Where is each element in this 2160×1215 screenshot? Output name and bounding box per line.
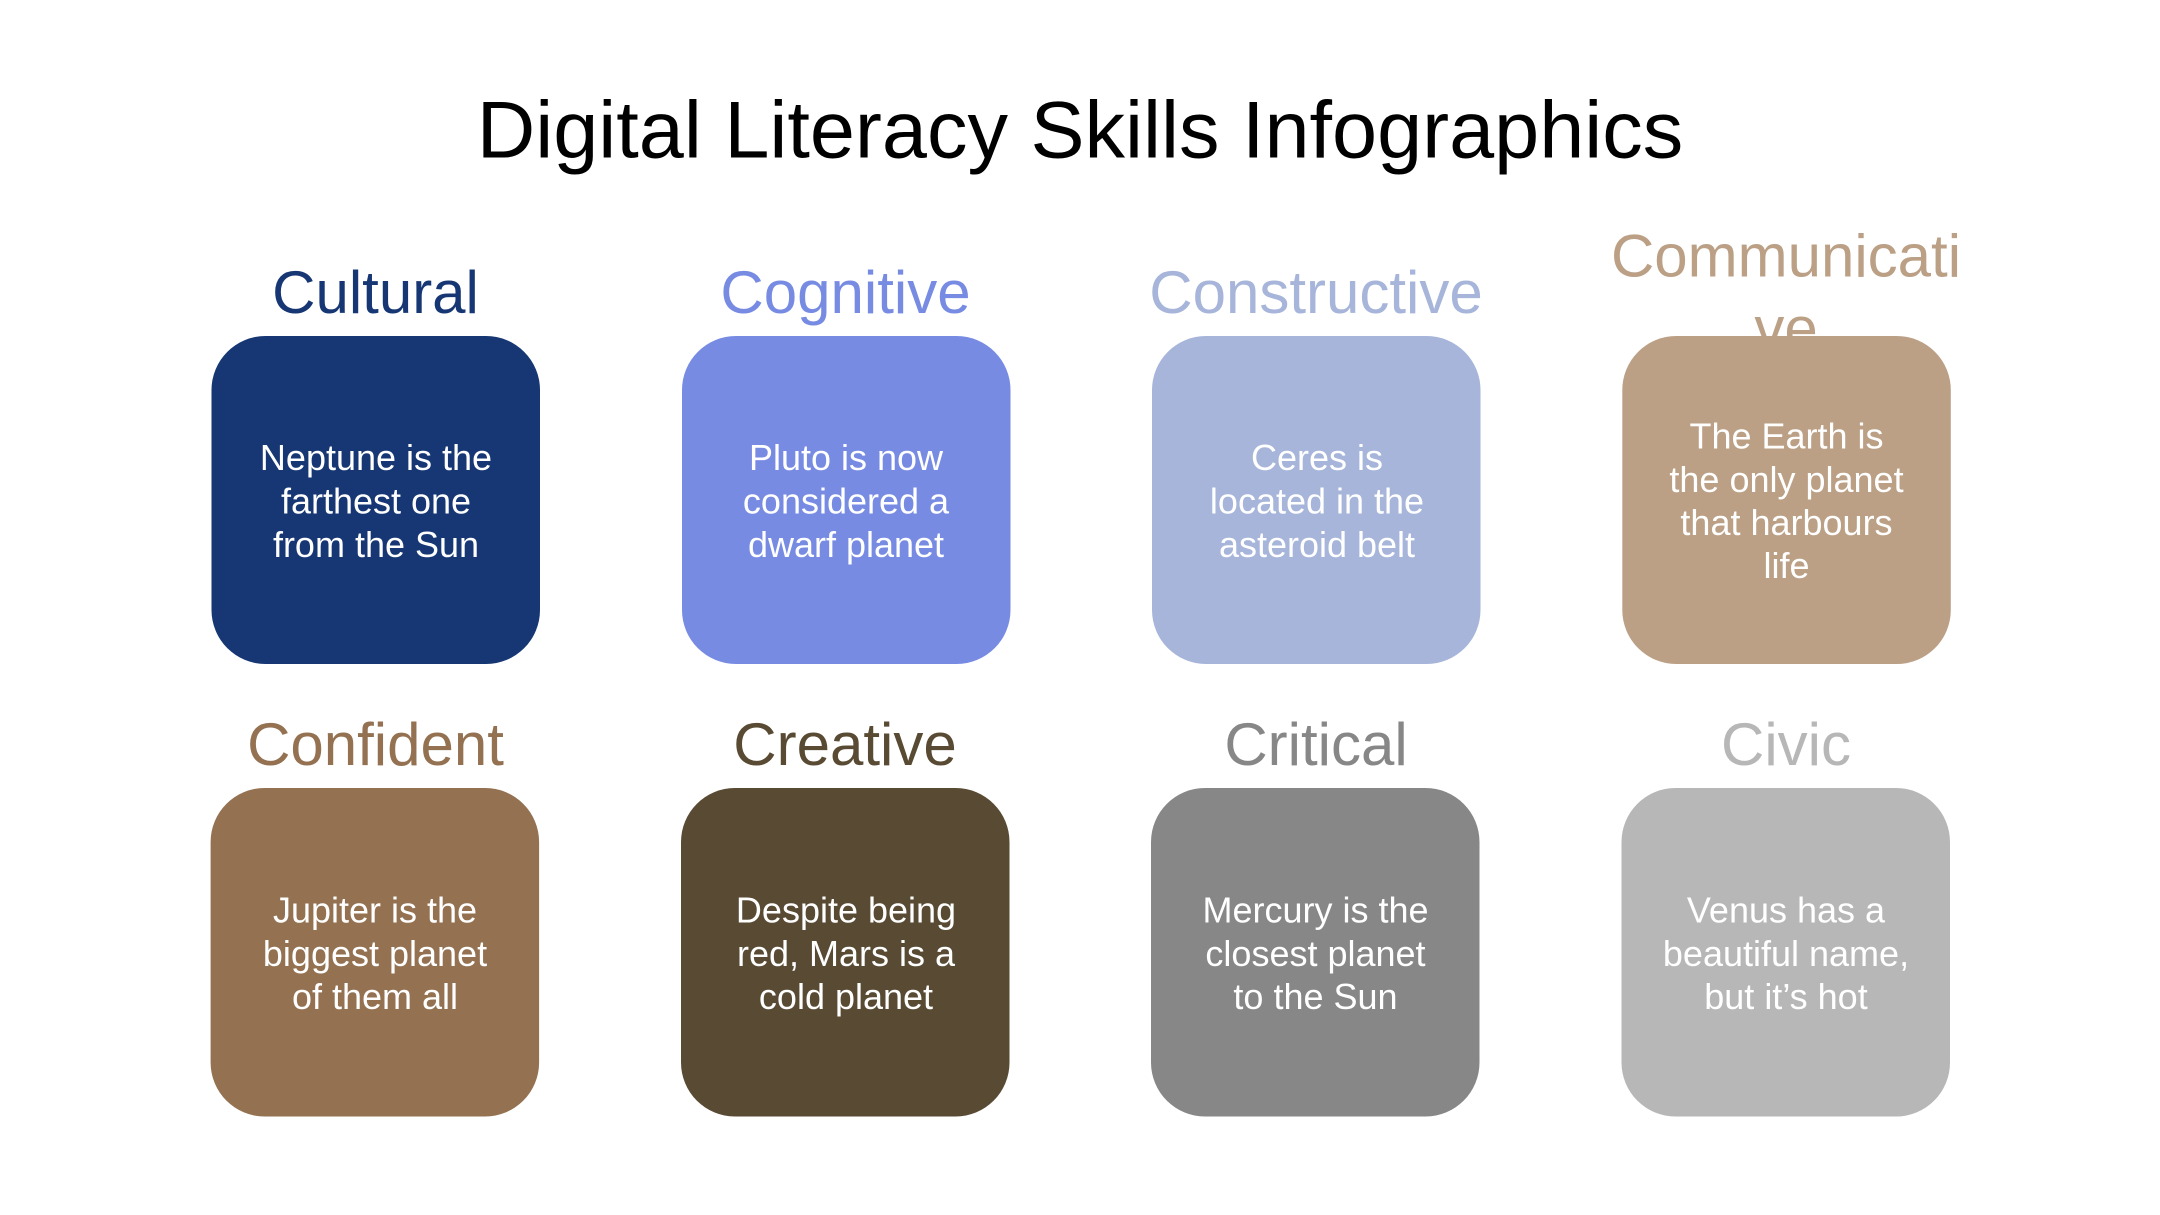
text: Civic description: beautiful name, xyxy=(1663,933,1909,974)
text: Cultural description: from the Sun xyxy=(273,524,479,565)
heading: Constructive: Constructive xyxy=(1149,259,1483,326)
heading: Communicative, wrapped behind the card: Communicati xyxy=(1611,222,1961,290)
text: Creative description: Despite being xyxy=(736,890,956,930)
panel: Confident xyxy=(211,711,539,1116)
heading: Critical: Critical xyxy=(1224,711,1408,778)
panel: Cognitive xyxy=(682,259,1010,664)
card: Cognitive xyxy=(682,336,1010,664)
text: Cultural description: farthest one xyxy=(281,480,471,522)
heading: Confident: Confident xyxy=(247,711,504,778)
title: Digital Literacy Skills Infographics xyxy=(477,86,1683,176)
text: Communicative description: life xyxy=(1763,545,1810,586)
text: Confident description: of them all xyxy=(292,976,458,1017)
panel: Constructive xyxy=(1149,259,1483,664)
heading: Cognitive: Cognitive xyxy=(720,259,971,326)
text: Communicative description: the only planet xyxy=(1669,459,1904,500)
heading: Creative: Creative xyxy=(733,711,957,778)
panel: Communicative xyxy=(1611,222,1961,664)
text: Critical description: to the Sun xyxy=(1233,976,1398,1017)
text: Critical description: closest planet xyxy=(1205,933,1426,974)
text: Creative description: cold planet xyxy=(759,976,933,1017)
text: Constructive description: asteroid belt xyxy=(1219,524,1415,565)
heading: Communicative, wrapped behind the card: ve xyxy=(1754,295,1818,362)
text: Cultural description: Neptune is the xyxy=(260,437,492,478)
panel: Civic xyxy=(1622,711,1950,1116)
text: Civic description: Venus has a xyxy=(1687,890,1886,930)
text: Civic description: but it’s hot xyxy=(1704,976,1868,1017)
card: Communicative xyxy=(1622,336,1951,664)
heading: Cultural: Cultural xyxy=(272,259,479,326)
text: Critical description: Mercury is the xyxy=(1202,890,1429,930)
card: Critical xyxy=(1151,788,1480,1116)
text: Confident description: Jupiter is the xyxy=(273,890,477,930)
text: Communicative description: that harbours xyxy=(1680,502,1893,543)
text: Cognitive description: Pluto is now xyxy=(749,437,944,478)
heading: Civic: Civic xyxy=(1721,711,1851,778)
panel: Cultural xyxy=(212,259,540,664)
panel: Critical xyxy=(1151,711,1480,1116)
card: Creative xyxy=(681,788,1010,1116)
panel: Creative xyxy=(681,711,1010,1116)
text: Constructive description: Ceres is xyxy=(1251,437,1383,478)
text: Cognitive description: considered a xyxy=(743,480,950,522)
text: Creative description: red, Mars is a xyxy=(737,933,956,974)
card: Constructive xyxy=(1152,336,1480,664)
card: Confident xyxy=(211,788,539,1116)
text: Communicative description: The Earth is xyxy=(1689,416,1884,456)
card: Cultural xyxy=(212,336,540,664)
text: Cognitive description: dwarf planet xyxy=(748,524,944,565)
text: Constructive description: located in the xyxy=(1210,480,1424,522)
card: Civic xyxy=(1622,788,1950,1116)
text: Confident description: biggest planet xyxy=(263,933,487,974)
